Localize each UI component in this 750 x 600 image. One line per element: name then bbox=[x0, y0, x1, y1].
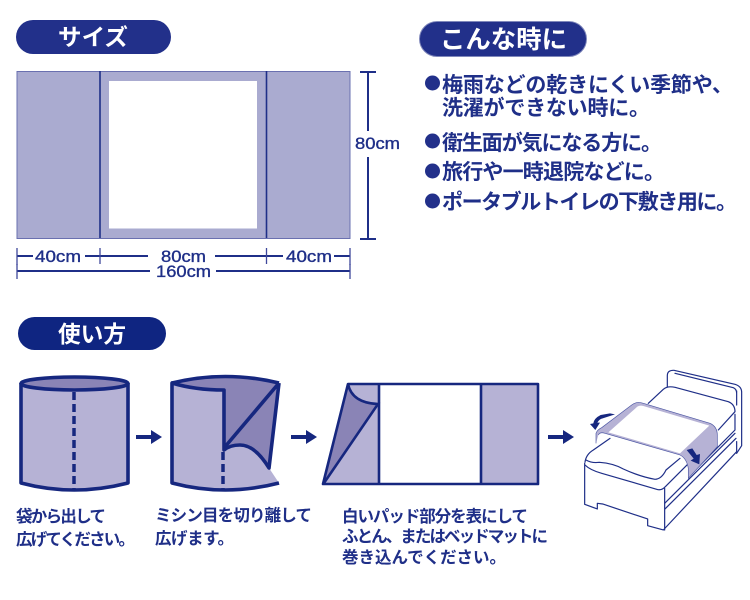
dimension: height 80cm: 80cm bbox=[355, 135, 400, 153]
list: use cases: 洗濯ができない時に。 bbox=[442, 96, 650, 120]
heading: size bbox=[16, 20, 171, 54]
panel: how to use bbox=[16, 317, 742, 567]
panel: size bbox=[16, 20, 400, 281]
mattress bbox=[585, 387, 736, 509]
arrow: tuck right bbox=[687, 448, 700, 464]
dimension: widths 40cm 80cm 40cm: 40cm bbox=[286, 248, 332, 266]
dimension: widths 40cm 80cm 40cm: 80cm bbox=[161, 248, 206, 266]
headboard bbox=[667, 370, 742, 453]
illustration: step 3 unfolded sheet bbox=[323, 384, 538, 484]
heading: how to use bbox=[18, 317, 166, 350]
caption: step 2: 広げます。 bbox=[155, 529, 234, 548]
dimension: widths 40cm 80cm 40cm: 40cm bbox=[35, 248, 81, 266]
dimension: width 160cm bbox=[17, 263, 350, 281]
arrow: step 2 to 3 bbox=[291, 430, 317, 444]
illustration: step 2 tearing along perforation bbox=[171, 376, 279, 490]
list: use cases bbox=[425, 74, 737, 214]
caption: step 1: 袋から出して bbox=[16, 507, 106, 526]
heading: when to use bbox=[420, 22, 586, 56]
caption: step 3: 白いパッド部分を表にして bbox=[342, 507, 528, 526]
list: use cases: ポータブルトイレの下敷き用に。 bbox=[442, 190, 737, 214]
heading: size: サイズ bbox=[58, 24, 128, 50]
caption: step 3: ふとん、またはベッドマットに bbox=[342, 527, 548, 546]
arrow: step 1 to 2 bbox=[136, 430, 162, 444]
heading: when to use: こんな時に bbox=[440, 26, 567, 54]
list: use cases: 梅雨などの乾きにくい季節や、 bbox=[442, 74, 733, 97]
caption: step 2 bbox=[155, 506, 312, 548]
bed base bbox=[585, 442, 737, 530]
caption: step 2: ミシン目を切り離して bbox=[155, 506, 312, 525]
caption: step 3 bbox=[342, 507, 548, 567]
sheet bbox=[596, 402, 717, 478]
dimension: widths 40cm 80cm 40cm bbox=[17, 248, 350, 266]
heading: how to use: 使い方 bbox=[58, 321, 126, 347]
panel: when to use bbox=[420, 22, 737, 214]
illustration: step 4 sheet on bed bbox=[585, 370, 742, 530]
dimension: height 80cm bbox=[355, 72, 400, 239]
caption: step 1 bbox=[16, 507, 135, 549]
caption: step 3: 巻き込んでください。 bbox=[342, 548, 506, 567]
arrow: fold left bbox=[590, 413, 615, 430]
illustration: step 1 rolled sheet bbox=[20, 377, 128, 490]
list: use cases: 衛生面が気になる方に。 bbox=[442, 131, 662, 155]
dimension: width 160cm: 160cm bbox=[156, 263, 211, 281]
arrow: step 3 to 4 bbox=[548, 430, 574, 444]
list: use cases: 旅行や一時退院などに。 bbox=[442, 161, 665, 184]
diagram: sheet layout bbox=[17, 71, 350, 238]
caption: step 1: 広げてください。 bbox=[16, 530, 135, 549]
